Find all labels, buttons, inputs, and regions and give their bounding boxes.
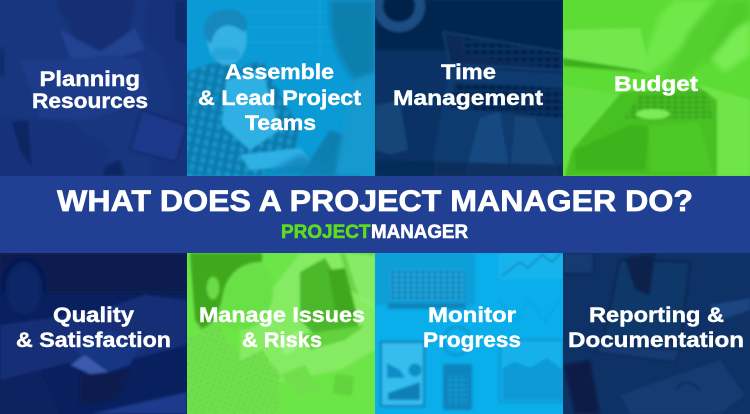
label: manage issues and risks <box>199 303 365 352</box>
panel: quality and satisfaction <box>0 253 187 414</box>
logo <box>281 221 468 243</box>
label: reporting and documentation <box>568 303 744 352</box>
label: planning resources: Resources <box>32 89 148 113</box>
label: reporting and documentation: Documentation <box>568 328 744 352</box>
label: monitor progress <box>423 303 521 352</box>
panel: manage issues and risks <box>187 253 375 414</box>
panel: time management <box>373 0 563 176</box>
label: assemble and lead project teams <box>198 60 361 135</box>
label: quality and satisfaction: & Satisfaction <box>16 328 171 352</box>
panel: planning resources <box>0 0 187 176</box>
panel: monitor progress <box>375 252 563 414</box>
label: time management <box>393 60 543 110</box>
label: quality and satisfaction <box>16 303 171 352</box>
panel: budget <box>563 0 750 176</box>
logo: MANAGER <box>371 221 468 243</box>
label: manage issues and risks: Manage Issues <box>199 303 365 327</box>
label: assemble and lead project teams: Assemble <box>225 60 334 84</box>
label: time management: Time <box>441 60 496 84</box>
label: manage issues and risks: & Risks <box>242 328 322 352</box>
label: planning resources <box>32 67 148 113</box>
panel: reporting and documentation <box>563 253 750 414</box>
label: monitor progress: Progress <box>423 328 521 352</box>
label: budget: Budget <box>614 72 698 96</box>
label: planning resources: Planning <box>40 67 140 91</box>
label: monitor progress: Monitor <box>428 303 517 327</box>
label: time management: Management <box>393 86 543 110</box>
label: assemble and lead project teams: Teams <box>245 111 316 135</box>
logo: PROJECT <box>281 221 371 243</box>
panel: assemble and lead project teams <box>187 0 375 176</box>
label: quality and satisfaction: Quality <box>53 303 134 327</box>
title: WHAT DOES A PROJECT MANAGER DO? <box>57 185 693 218</box>
label: reporting and documentation: Reporting & <box>589 303 724 327</box>
label: assemble and lead project teams: & Lead Project <box>198 86 361 110</box>
banner <box>0 176 750 253</box>
